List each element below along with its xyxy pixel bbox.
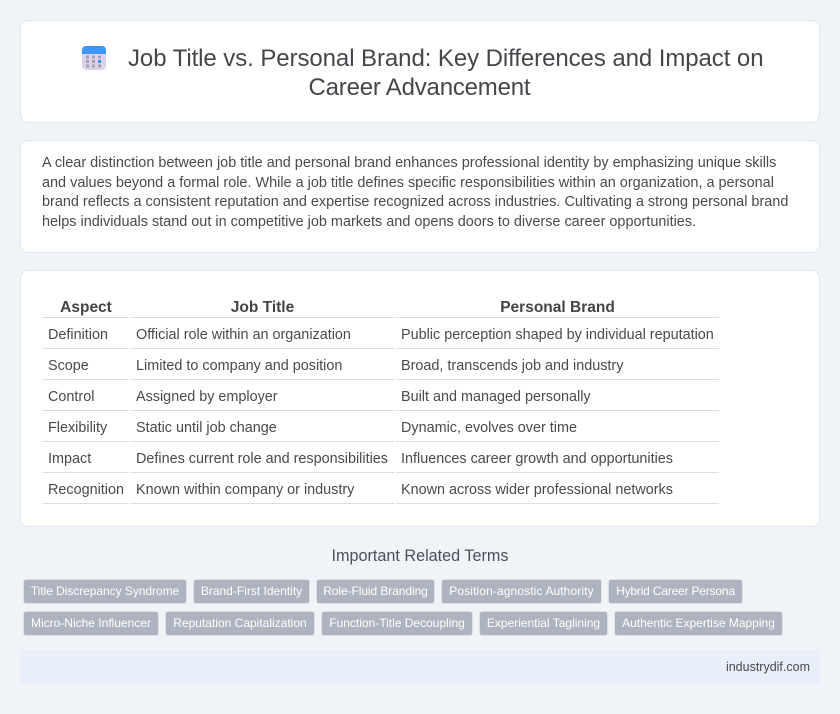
title: Career Advancement bbox=[308, 74, 530, 101]
comparison table: Job Title bbox=[231, 299, 294, 316]
tag bbox=[23, 611, 159, 636]
tag bbox=[614, 611, 783, 636]
intro text panel bbox=[20, 140, 820, 253]
comparison table: Impact bbox=[48, 451, 91, 467]
header panel bbox=[20, 20, 820, 123]
intro paragraph: brand reflects a consistent reputation and expertise recognized across industries. Cultivating a strong personal brand bbox=[42, 194, 788, 210]
comparison table bbox=[43, 299, 719, 504]
title bbox=[128, 45, 763, 101]
tag: Hybrid Career Persona bbox=[616, 584, 735, 598]
comparison table: Known across wider professional networks bbox=[401, 482, 673, 498]
tag: Brand-First Identity bbox=[201, 584, 302, 598]
title: Job Title vs. Personal Brand: Key Differences and Impact on bbox=[128, 45, 763, 72]
comparison table: Recognition bbox=[48, 482, 124, 498]
comparison table: Dynamic, evolves over time bbox=[401, 420, 577, 436]
comparison table: Personal Brand bbox=[500, 299, 615, 316]
comparison table: Defines current role and responsibilities bbox=[136, 451, 388, 467]
tag: Experiential Taglining bbox=[487, 616, 600, 630]
tag bbox=[608, 579, 743, 604]
tag: Function-Title Decoupling bbox=[329, 616, 465, 630]
comparison table: Built and managed personally bbox=[401, 389, 591, 405]
intro paragraph: helps individuals stand out in competitive job markets and opens doors to diverse career opportunities. bbox=[42, 214, 696, 230]
tag bbox=[479, 611, 608, 636]
comparison table: Control bbox=[48, 389, 94, 405]
comparison table: Definition bbox=[48, 327, 108, 343]
tag: Title Discrepancy Syndrome bbox=[31, 584, 179, 598]
comparison table: Limited to company and position bbox=[136, 358, 342, 374]
tag: Reputation Capitalization bbox=[173, 616, 307, 630]
comparison table: Influences career growth and opportunities bbox=[401, 451, 673, 467]
comparison table: Official role within an organization bbox=[136, 327, 351, 343]
tag: Micro-Niche Influencer bbox=[31, 616, 151, 630]
tag bbox=[165, 611, 315, 636]
comparison table: Broad, transcends job and industry bbox=[401, 358, 623, 374]
tag bbox=[193, 579, 310, 604]
footer source: industrydif.com bbox=[726, 660, 810, 674]
comparison table: Static until job change bbox=[136, 420, 277, 436]
intro paragraph: A clear distinction between job title and personal brand enhances professional identity by emphasizing unique skills bbox=[42, 155, 776, 171]
comparison table: Scope bbox=[48, 358, 89, 374]
tag bbox=[321, 611, 473, 636]
comparison table: Assigned by employer bbox=[136, 389, 278, 405]
comparison table: Public perception shaped by individual reputation bbox=[401, 327, 714, 343]
tag bbox=[441, 579, 602, 604]
tag: Position-agnostic Authority bbox=[449, 584, 594, 598]
related terms tags bbox=[23, 579, 783, 636]
related terms heading: Important Related Terms bbox=[332, 547, 508, 565]
comparison table panel bbox=[20, 270, 820, 527]
comparison table: Flexibility bbox=[48, 420, 107, 436]
icon: calendar bbox=[82, 46, 106, 70]
intro paragraph: and values beyond a formal role. While a job title defines specific responsibilities within an organization, a personal bbox=[42, 174, 774, 190]
tag: Role-Fluid Branding bbox=[323, 584, 428, 598]
comparison table: Aspect bbox=[60, 299, 112, 316]
intro paragraph bbox=[42, 155, 788, 230]
tag: Authentic Expertise Mapping bbox=[622, 616, 775, 630]
tag bbox=[23, 579, 187, 604]
footer bar bbox=[20, 650, 820, 684]
comparison table: Known within company or industry bbox=[136, 482, 354, 498]
tag bbox=[316, 579, 435, 604]
